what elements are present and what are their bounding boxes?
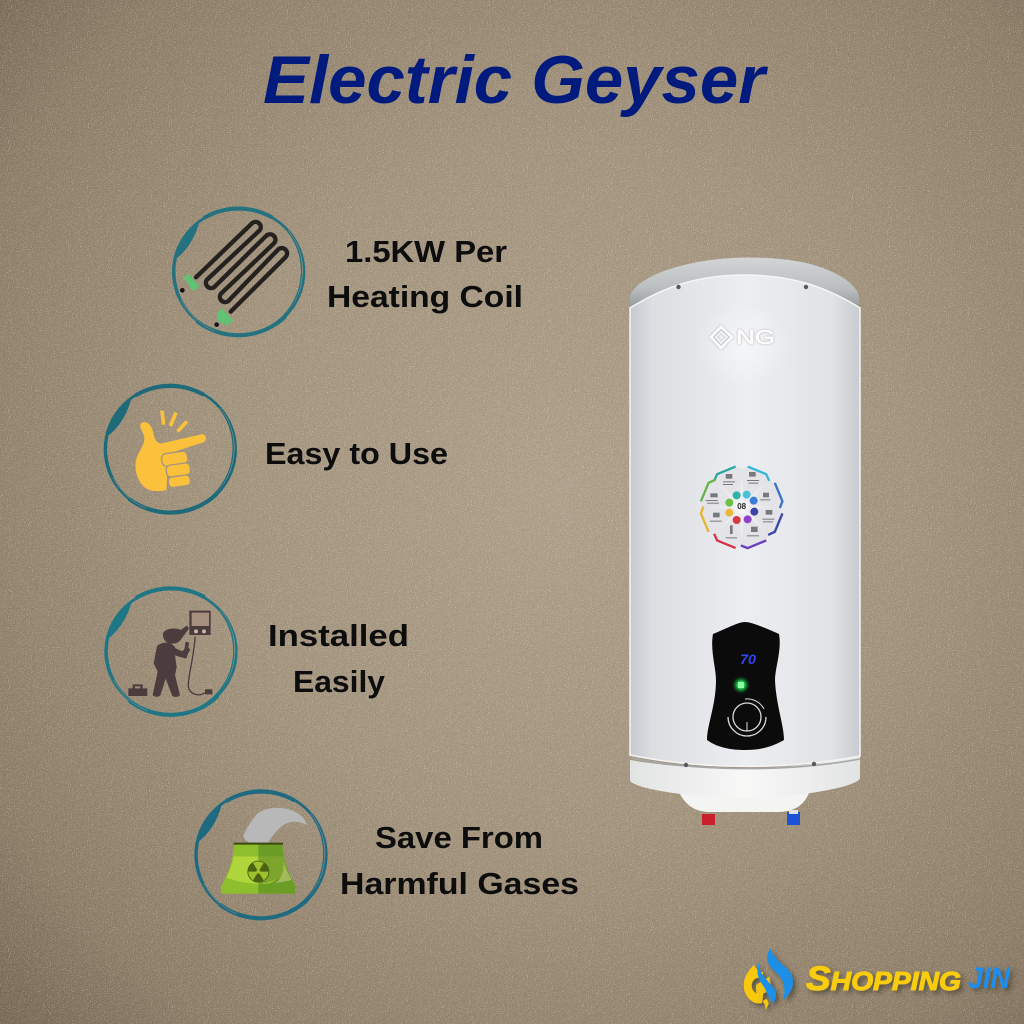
heater bottom knob <box>678 790 810 812</box>
logo wordmark: SHOPPING <box>806 960 961 998</box>
control panel <box>707 622 784 750</box>
octagonal feature sticker: 08 <box>737 502 747 511</box>
screws <box>676 285 816 767</box>
feature: easy to use <box>94 372 448 525</box>
feature: harmful gases <box>185 778 579 930</box>
brand logo NG: NG <box>736 327 775 349</box>
label: installed easily: Installed <box>268 618 409 653</box>
label: heating coil: Heating Coil <box>327 279 523 314</box>
label: heating coil: 1.5KW Per <box>345 234 507 269</box>
brand logo: Shopping Jin: JIN <box>968 962 1011 995</box>
label: harmful gases <box>340 820 579 901</box>
icon: green cooling tower with smoke in ring <box>185 778 336 930</box>
label: installed easily: Easily <box>293 664 386 699</box>
icon: heating coil in ring <box>163 195 313 347</box>
label: harmful gases: Harmful Gases <box>340 866 579 901</box>
temperature dial <box>728 699 766 736</box>
highlight <box>695 303 795 387</box>
temperature display: 70 <box>740 651 756 667</box>
heater main body <box>630 275 860 766</box>
label: heating coil <box>327 234 523 314</box>
label: installed easily <box>268 618 409 699</box>
heater water pipes <box>702 810 800 825</box>
brand logo NG <box>711 327 775 349</box>
heater bottom flange <box>630 756 860 798</box>
icon: pointing hand in ring <box>94 372 245 525</box>
heater top cap <box>630 258 859 312</box>
octagonal feature sticker <box>699 465 784 550</box>
label: harmful gases: Save From <box>375 820 543 855</box>
power LED <box>732 676 750 694</box>
label: easy to use: Easy to Use <box>265 436 448 471</box>
title: Electric Geyser <box>263 42 769 118</box>
feature: heating coil <box>163 195 523 347</box>
product: electric water heater <box>630 258 860 825</box>
brand logo: Shopping Jin <box>744 948 1011 1010</box>
icon: technician installing geyser in ring <box>95 576 246 726</box>
logo flame icon <box>744 948 793 1010</box>
feature: installed easily <box>95 576 409 726</box>
